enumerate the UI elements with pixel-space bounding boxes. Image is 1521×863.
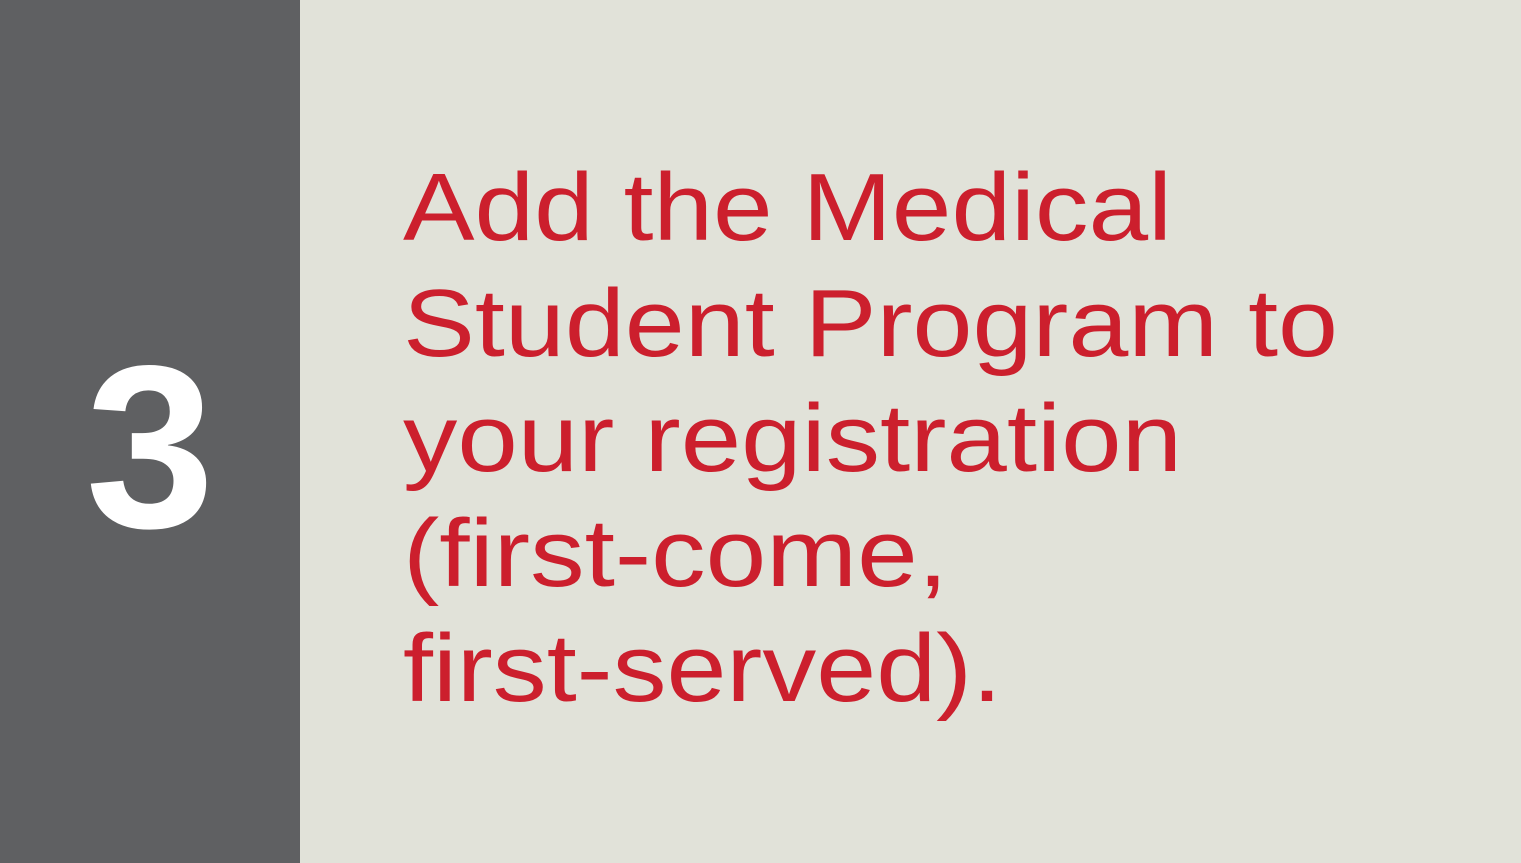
text block: instruction: Add the Medical	[403, 154, 1172, 261]
panel: left step number sidebar	[0, 0, 300, 863]
text block: instruction: Student Program to	[403, 270, 1338, 377]
step number 3: 3	[85, 318, 215, 577]
text block: instruction	[403, 154, 1338, 722]
text block: instruction: your registration	[403, 385, 1182, 492]
text block: instruction: (first-come,	[403, 500, 948, 607]
text block: instruction: first-served).	[403, 615, 1002, 722]
